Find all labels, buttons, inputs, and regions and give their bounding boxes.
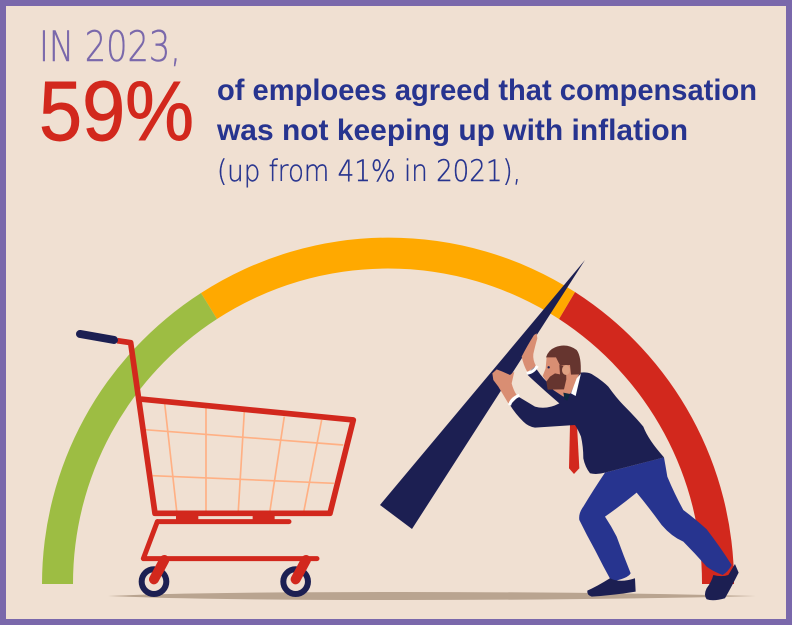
trousers <box>579 457 732 582</box>
cart mesh <box>145 403 343 511</box>
neck shadow <box>563 393 570 401</box>
text block: statement: was not keeping up with inflation <box>216 114 688 147</box>
gauge arc <box>42 238 734 584</box>
gauge: red segment <box>559 292 734 584</box>
left shoe <box>587 578 636 597</box>
text block: statement: (up from 41% in 2021), <box>217 154 521 188</box>
cart chassis <box>143 514 317 559</box>
big number: 59%: 59% <box>39 64 194 158</box>
gauge needle <box>380 260 585 529</box>
ear <box>562 365 570 375</box>
tie <box>569 425 579 474</box>
gauge: green segment <box>42 293 217 584</box>
cart basket frame and handle bar <box>117 341 353 513</box>
figure: man pushing needle <box>492 333 739 600</box>
upper hand <box>522 333 537 372</box>
cart forks <box>154 560 306 579</box>
heading: in 2023: IN 2023, <box>39 22 181 71</box>
lower hand <box>492 369 517 403</box>
shirt collar <box>571 373 581 396</box>
shirt cuffs <box>510 366 537 405</box>
right shoe <box>705 564 739 600</box>
ground shadow <box>108 592 756 600</box>
text block: statement <box>216 74 757 188</box>
face and neck <box>543 357 579 397</box>
jacket <box>510 367 664 474</box>
beard <box>546 365 566 390</box>
gauge: orange segment <box>201 238 575 319</box>
icon: shopping cart <box>80 334 353 594</box>
cart grip <box>80 334 114 340</box>
text block: statement: of emploees agreed that compensation <box>217 74 757 107</box>
hair <box>546 346 581 375</box>
eye <box>547 366 550 368</box>
cart wheels <box>142 569 308 594</box>
